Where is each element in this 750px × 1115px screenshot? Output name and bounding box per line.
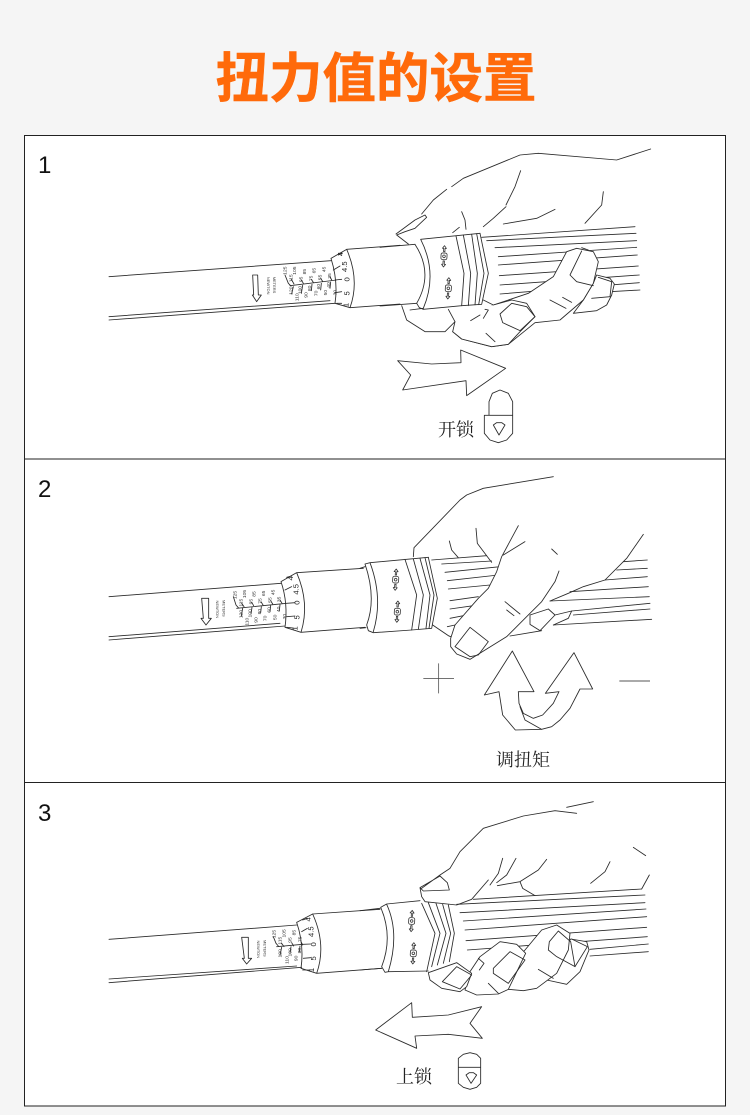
unit label xyxy=(266,277,277,295)
scale numbers: 125 xyxy=(272,930,278,938)
panel: step 1 unlock xyxy=(24,136,726,459)
caption: lock: 上锁 xyxy=(396,1067,433,1087)
unit label: METERS xyxy=(263,940,268,957)
scale numbers: 120 xyxy=(238,610,244,618)
dial numbers: 5 xyxy=(292,615,301,619)
dial numbers: 1 xyxy=(342,303,351,307)
step number 1: 1 xyxy=(38,152,51,179)
wrench shaft and scale: step 1 xyxy=(109,245,400,320)
dial numbers: 4 xyxy=(286,575,295,580)
scale numbers: 80 xyxy=(257,609,263,614)
dial numbers: 4 xyxy=(304,916,313,921)
hand on grip, arrow and lock: step 3 xyxy=(360,802,649,1089)
scale numbers: 120 xyxy=(278,949,284,957)
caption: unlock: 开锁 xyxy=(438,420,475,440)
collar lock marks xyxy=(410,943,417,964)
lower finger xyxy=(530,609,555,631)
scale numbers: 70 xyxy=(263,615,269,621)
scale numbers xyxy=(233,589,288,626)
scale arrow xyxy=(252,275,261,302)
dial numbers: 4.5 xyxy=(340,261,349,272)
wrench shaft and scale: step 3 xyxy=(109,909,382,983)
dial numbers: 1 xyxy=(307,968,316,972)
dial numbers: 0 xyxy=(342,277,351,281)
dial numbers xyxy=(286,575,301,630)
scale numbers: 60 xyxy=(267,607,273,613)
unit label: METERS xyxy=(272,277,277,294)
dial numbers: 4 xyxy=(336,251,345,256)
scale numbers: 75 xyxy=(258,598,264,604)
wrench shaft and scale: step 2 xyxy=(109,568,365,640)
title: 扭力值的设置 xyxy=(216,50,536,109)
unit label: NEWTON xyxy=(266,277,271,295)
caption: adjust torque: 调扭矩 xyxy=(496,750,550,770)
dial numbers: 0 xyxy=(309,942,318,946)
scale numbers: 105 xyxy=(282,929,288,937)
panel: step 3 lock xyxy=(24,782,726,1106)
collar lock marks xyxy=(394,601,401,622)
minus sign xyxy=(619,679,650,683)
scale numbers: 115 xyxy=(278,936,284,945)
scale numbers xyxy=(283,266,339,301)
scale numbers: 30 xyxy=(282,614,288,619)
scale numbers: 60 xyxy=(316,284,322,289)
scale numbers: 110 xyxy=(294,293,300,301)
middle finger xyxy=(465,942,526,995)
scale numbers: 115 xyxy=(288,274,294,282)
grip collar xyxy=(380,233,488,309)
rotation arrows xyxy=(484,651,593,730)
scale numbers: 40 xyxy=(326,282,332,288)
back finger xyxy=(547,939,589,984)
scale numbers: 120 xyxy=(288,286,294,295)
scale numbers: 125 xyxy=(283,266,289,275)
scale arrow xyxy=(242,937,252,964)
scale numbers: 125 xyxy=(233,591,239,599)
scale numbers: 105 xyxy=(292,266,298,275)
dial numbers: 1 xyxy=(290,626,299,630)
lower palm behind grip xyxy=(402,306,455,332)
dial numbers xyxy=(304,916,318,972)
scale arrow xyxy=(201,598,211,625)
hand on grip and rotation arrows: step 2 xyxy=(360,477,652,730)
scale numbers: 65 xyxy=(311,268,317,273)
grip collar xyxy=(360,901,454,972)
dial numbers: 4.5 xyxy=(306,926,315,937)
panel: step 2 adjust torque xyxy=(24,459,726,782)
scale numbers: 100 xyxy=(288,948,294,956)
scale numbers: 95 xyxy=(288,937,294,943)
scale numbers: 90 xyxy=(304,292,310,298)
scale numbers: 45 xyxy=(321,266,327,272)
scale numbers: 65 xyxy=(261,590,267,596)
collar lock marks xyxy=(392,569,399,590)
scale numbers: 115 xyxy=(239,598,245,607)
grip ribs xyxy=(457,889,648,956)
finger with nail xyxy=(500,925,570,991)
grip ribs xyxy=(432,556,652,636)
scale numbers: 50 xyxy=(323,290,329,295)
closed lock icon xyxy=(458,1053,481,1089)
dial numbers: 0 xyxy=(292,601,301,605)
upper hand outline xyxy=(413,477,643,637)
scale numbers: 40 xyxy=(276,606,282,612)
scale numbers: 110 xyxy=(244,617,250,626)
upper hand outline xyxy=(396,149,651,244)
scale numbers: 55 xyxy=(267,597,273,603)
collar lock marks xyxy=(440,246,448,267)
collar lock marks xyxy=(408,910,415,932)
step number 2: 2 xyxy=(38,476,51,503)
unit label: NEWTON xyxy=(215,601,220,618)
scale numbers: 30 xyxy=(333,290,339,295)
upper hand outline and thumb xyxy=(420,802,649,905)
dial numbers: 4.5 xyxy=(292,584,301,595)
scale numbers: 85 xyxy=(252,591,258,597)
scale numbers: 90 xyxy=(254,617,260,623)
thumb with nail xyxy=(451,526,559,659)
arrow left xyxy=(376,1003,482,1048)
scale numbers: 85 xyxy=(292,930,298,935)
scale numbers: 80 xyxy=(307,285,313,291)
unit label xyxy=(256,940,268,958)
scale numbers: 105 xyxy=(242,590,248,598)
unit label xyxy=(215,600,227,618)
open lock icon xyxy=(484,390,513,443)
scale numbers: 95 xyxy=(298,276,304,282)
scale numbers: 35 xyxy=(327,273,333,279)
hand on grip, arrow and lock: step 1 xyxy=(380,149,651,443)
scale numbers: 110 xyxy=(284,956,290,964)
thumb tip xyxy=(453,300,535,347)
collar lock marks xyxy=(445,278,452,299)
little finger xyxy=(428,963,472,992)
scale numbers: 55 xyxy=(318,274,324,280)
back finger xyxy=(573,275,614,313)
scale numbers: 35 xyxy=(277,596,283,602)
scale numbers: 70 xyxy=(314,290,320,296)
scale numbers: 45 xyxy=(271,589,277,595)
front finger with nail xyxy=(453,248,598,347)
scale numbers xyxy=(272,929,304,964)
dial numbers: 5 xyxy=(309,956,318,960)
scale numbers: 85 xyxy=(302,269,308,274)
scale numbers: 90 xyxy=(294,955,300,961)
dial numbers xyxy=(336,251,351,307)
unit label: METERS xyxy=(222,600,227,617)
scale numbers: 95 xyxy=(248,599,254,604)
grip collar xyxy=(360,557,437,633)
scale numbers: 100 xyxy=(298,286,304,294)
arrow right xyxy=(398,350,506,396)
scale numbers: 100 xyxy=(248,609,254,617)
dial numbers: 5 xyxy=(342,291,351,295)
scale numbers: 75 xyxy=(298,936,304,942)
plus sign xyxy=(423,663,454,693)
step number 3: 3 xyxy=(38,800,51,827)
unit label: NEWTON xyxy=(256,941,261,958)
scale numbers: 80 xyxy=(297,948,303,953)
scale numbers: 50 xyxy=(272,614,278,620)
grip ribs xyxy=(482,227,640,294)
scale numbers: 75 xyxy=(308,275,314,281)
